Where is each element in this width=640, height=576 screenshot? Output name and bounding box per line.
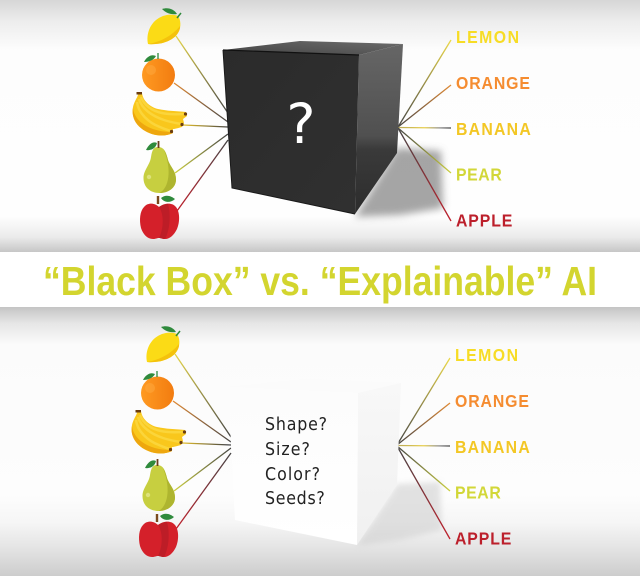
fruit column: explainable	[132, 326, 186, 557]
label: banana: BANANA	[456, 119, 531, 139]
icon: apple	[139, 514, 178, 557]
question mark: ?	[286, 92, 316, 156]
fruit column: black box	[133, 8, 187, 239]
icon: pear	[142, 459, 175, 511]
labels: black box outputs	[456, 27, 531, 231]
black cube	[223, 41, 403, 214]
label: orange: ORANGE	[455, 391, 529, 411]
question list: Seeds?	[265, 487, 325, 508]
title band	[0, 252, 640, 307]
label: apple: APPLE	[456, 210, 512, 231]
white box shadow	[357, 482, 442, 546]
icon: orange	[142, 53, 175, 92]
label: banana: BANANA	[455, 437, 530, 457]
label: pear: PEAR	[455, 482, 501, 503]
question list: Shape?	[265, 413, 327, 434]
icon: pear	[144, 141, 176, 193]
icon: orange	[141, 371, 174, 410]
labels: explainable outputs	[455, 345, 530, 549]
question list	[265, 413, 327, 508]
icon: lemon	[147, 8, 181, 44]
question list: Color?	[265, 463, 320, 484]
panel: explainable box background	[0, 307, 640, 576]
label: pear: PEAR	[456, 164, 502, 185]
icon: lemon	[146, 326, 180, 362]
label: orange: ORANGE	[456, 73, 530, 93]
connector lines: black box inputs	[174, 36, 228, 211]
question list: Size?	[265, 438, 310, 459]
label: apple: APPLE	[455, 528, 511, 549]
icon: banana	[133, 92, 187, 136]
label: lemon: LEMON	[455, 345, 518, 365]
black box shadow	[355, 148, 443, 217]
icon: apple	[140, 196, 179, 239]
connector lines: explainable inputs	[173, 354, 231, 529]
icon: banana	[132, 410, 186, 454]
label: lemon: LEMON	[456, 27, 519, 47]
white cube	[228, 379, 401, 545]
panel: black box background	[0, 0, 640, 252]
connector lines: explainable outputs	[397, 358, 450, 539]
connector lines: black box outputs	[398, 40, 451, 221]
